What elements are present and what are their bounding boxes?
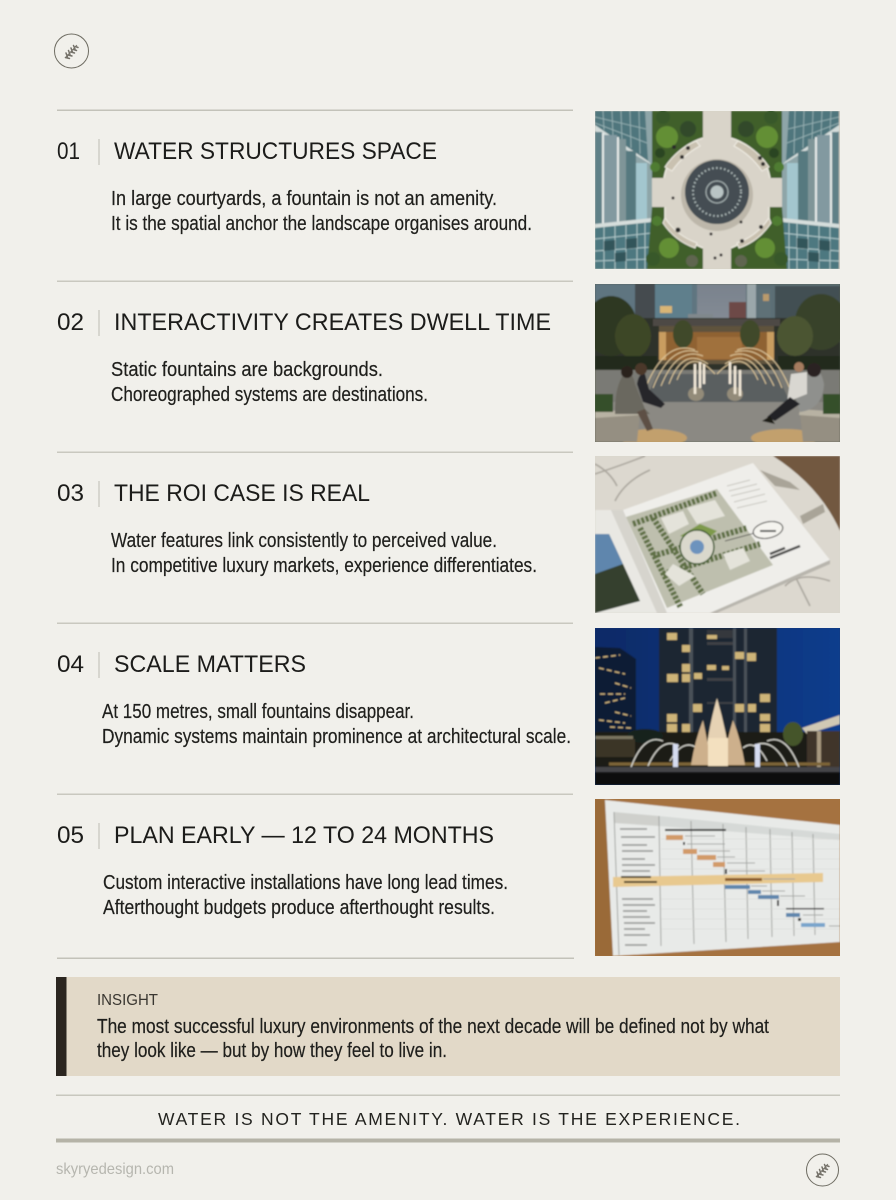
photo: plaza fountain with seated people — [585, 284, 847, 447]
body 03: In competitive luxury markets, experience differentiates. — [111, 555, 537, 577]
body 03: Water features link consistently to perceived value. — [111, 530, 497, 552]
body 02: Choreographed systems are destinations. — [111, 384, 428, 406]
insight callout — [56, 977, 840, 1076]
section 03 — [57, 452, 573, 577]
body 04 — [102, 701, 571, 748]
number 01: 01 — [57, 138, 80, 165]
body 02: Static fountains are backgrounds. — [111, 359, 383, 381]
body 01: It is the spatial anchor the landscape organises around. — [111, 213, 532, 235]
section 05 — [57, 794, 574, 959]
insight label: INSIGHT — [97, 992, 159, 1009]
number 05: 05 — [57, 822, 84, 849]
heading 02: INTERACTIVITY CREATES DWELL TIME — [114, 309, 551, 336]
heading 05: PLAN EARLY — 12 TO 24 MONTHS — [114, 822, 494, 849]
body 05 — [103, 872, 508, 919]
insight text: they look like — but by how they feel to live in. — [97, 1040, 447, 1062]
number 03: 03 — [57, 480, 84, 507]
photo: tower at dusk with fountain — [595, 628, 840, 785]
insight text — [97, 1016, 769, 1062]
icon: wheat emblem bottom — [806, 1154, 838, 1186]
closing statement — [56, 1094, 840, 1142]
body 01: In large courtyards, a fountain is not an amenity. — [111, 188, 497, 210]
heading 04: SCALE MATTERS — [114, 651, 306, 678]
insight text: The most successful luxury environments of the next decade will be defined not by what — [97, 1016, 769, 1038]
photo: brochure on marble table — [595, 456, 840, 613]
body 01 — [111, 188, 532, 235]
footer website: skyryedesign.com — [56, 1161, 174, 1178]
number 02: 02 — [57, 309, 84, 336]
body 04: At 150 metres, small fountains disappear. — [102, 701, 414, 723]
accent bar — [56, 977, 66, 1076]
body 05: Afterthought budgets produce afterthought results. — [103, 897, 495, 919]
body 05: Custom interactive installations have long lead times. — [103, 872, 508, 894]
section 01 — [57, 110, 573, 235]
heading 03: THE ROI CASE IS REAL — [114, 480, 370, 507]
icon: wheat emblem top — [54, 34, 88, 68]
body 03 — [111, 530, 537, 577]
section 04 — [57, 622, 573, 748]
section 02 — [57, 280, 573, 406]
number 04: 04 — [57, 651, 84, 678]
body 02 — [111, 359, 428, 406]
photo: gantt chart on cork wall — [595, 799, 840, 956]
body 04: Dynamic systems maintain prominence at architectural scale. — [102, 726, 571, 748]
closing statement: WATER IS NOT THE AMENITY. WATER IS THE EXPERIENCE. — [158, 1109, 740, 1129]
photo: aerial courtyard fountain — [595, 110, 840, 269]
heading 01: WATER STRUCTURES SPACE — [114, 138, 437, 165]
